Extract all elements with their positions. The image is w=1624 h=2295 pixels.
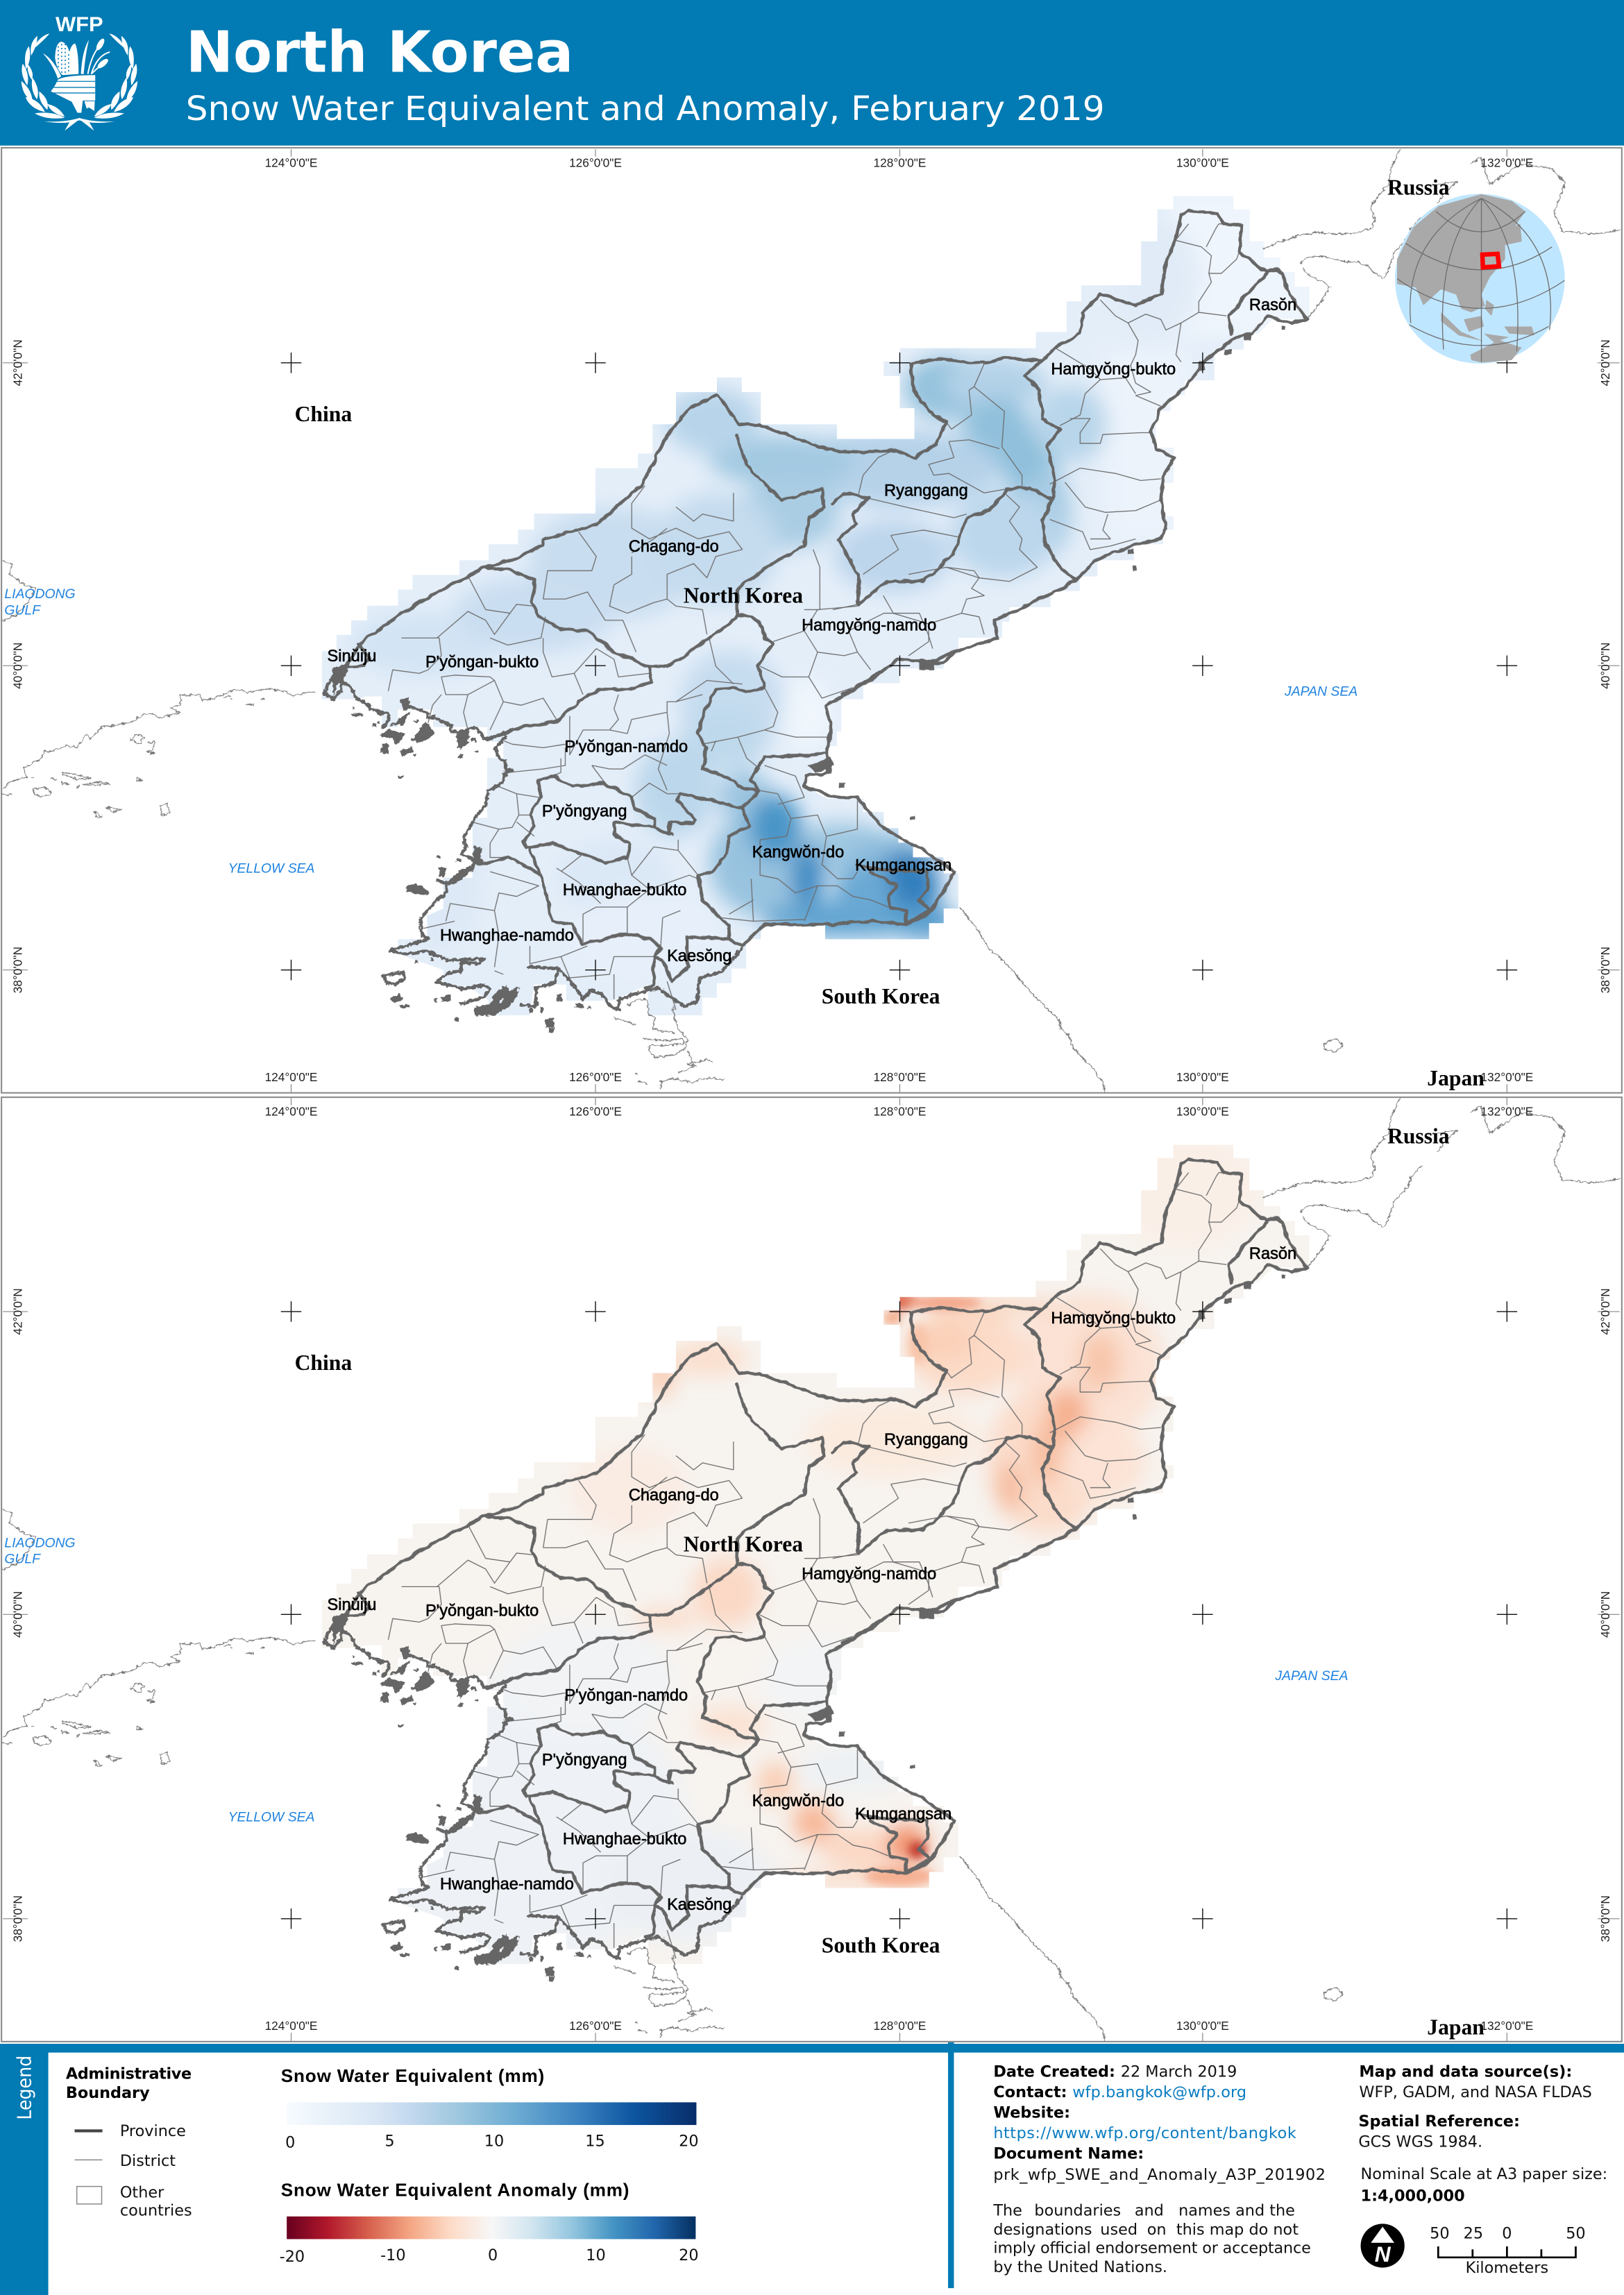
map labels: YELLOW SEA (228, 861, 315, 876)
map labels: Kumgangsan (855, 1805, 951, 1823)
map labels: 124°0'0"E (265, 1104, 317, 1118)
map labels: Ryanggang (884, 482, 968, 500)
map labels: 42°0'0"N (1598, 339, 1612, 386)
legend: anomaly colour ramp: 0 (488, 2246, 498, 2264)
map labels: 40°0'0"N (11, 643, 25, 689)
legend: anomaly colour ramp: -10 (380, 2246, 406, 2264)
document information: Website: (993, 2103, 1070, 2122)
map labels: JAPAN SEA (1284, 684, 1357, 699)
legend: administrative boundary: countries (120, 2202, 192, 2220)
disclaimer: imply official endorsement or acceptance (993, 2239, 1311, 2257)
legend: snow water equivalent colour ramp: 15 (585, 2133, 605, 2151)
document information: Contact: (993, 2083, 1067, 2101)
map labels: 40°0'0"N (1598, 1591, 1612, 1638)
map labels (4, 155, 1612, 1090)
chart: snow water equivalent raster (322, 196, 1310, 1015)
disclaimer: used (1100, 2221, 1137, 2239)
map labels: 38°0'0"N (1598, 1895, 1612, 1942)
map: province and district boundaries (325, 211, 1308, 1032)
legend: snow water equivalent colour ramp: 5 (384, 2133, 395, 2151)
document information: Date Created: (993, 2063, 1115, 2081)
map labels: 38°0'0"N (11, 947, 25, 993)
chart: anomaly raster (322, 1145, 1309, 1964)
map labels: North Korea (684, 584, 803, 608)
icon: WFP logo: WFP (56, 13, 103, 36)
data sources and reference: Spatial Reference: (1358, 2112, 1520, 2131)
legend: anomaly colour ramp: 10 (586, 2246, 606, 2264)
data sources and reference: Nominal Scale at A3 paper size: (1361, 2165, 1607, 2183)
map labels: China (295, 1350, 352, 1375)
disclaimer: designations (993, 2221, 1092, 2239)
map labels: Kangwŏn-do (752, 843, 844, 861)
document information (993, 2063, 1326, 2184)
map labels: 38°0'0"N (11, 1895, 25, 1942)
document information: prk_wfp_SWE_and_Anomaly_A3P_201902 (993, 2166, 1326, 2184)
map labels: 38°0'0"N (1598, 947, 1612, 993)
map labels: 132°0'0"E (1480, 2019, 1533, 2033)
map labels: 126°0'0"E (569, 155, 622, 169)
map labels: North Korea (684, 1532, 803, 1557)
map labels: Ryanggang (884, 1431, 968, 1449)
map labels: 126°0'0"E (569, 2019, 622, 2033)
map labels: 42°0'0"N (1598, 1288, 1612, 1335)
map labels: 40°0'0"N (11, 1591, 25, 1638)
map: graticule (3, 1098, 1620, 2042)
map labels: 126°0'0"E (569, 1104, 622, 1118)
legend: administrative boundary: Other (120, 2183, 164, 2201)
map labels: Japan (1427, 2015, 1485, 2039)
map labels: 42°0'0"N (11, 339, 25, 386)
disclaimer: and (1135, 2202, 1164, 2220)
map labels: P'yŏngyang (542, 1751, 627, 1769)
map labels: Sinŭiju (328, 1596, 376, 1614)
map labels: Hamgyŏng-bukto (1051, 361, 1176, 379)
map labels: 128°0'0"E (874, 1070, 926, 1084)
legend: snow water equivalent colour ramp: 20 (679, 2133, 699, 2151)
map labels: 124°0'0"E (265, 1070, 317, 1084)
map labels: 130°0'0"E (1176, 2019, 1229, 2033)
map labels: Russia (1387, 1124, 1450, 1148)
map labels: South Korea (822, 1933, 940, 1957)
document information: wfp.bangkok@wfp.org (1072, 2083, 1246, 2101)
document information: https://www.wfp.org/content/bangkok (993, 2124, 1296, 2142)
icon: north arrow: N (1375, 2242, 1392, 2267)
map labels: 128°0'0"E (874, 155, 926, 169)
legend: administrative boundary: District (120, 2152, 176, 2170)
map labels: 132°0'0"E (1480, 155, 1533, 169)
map labels: Hwanghae-bukto (563, 1830, 686, 1848)
map labels: Chagang-do (629, 538, 719, 556)
map labels: Russia (1387, 175, 1450, 199)
map labels: Kaesŏng (667, 947, 731, 965)
panel: legend (0, 2042, 1624, 2295)
map labels: GULF (4, 602, 41, 618)
icon: WFP logo (22, 13, 137, 130)
inset: locator globe (1395, 194, 1565, 364)
legend: snow water equivalent colour ramp: Snow Water Equivalent (mm) (281, 2065, 544, 2086)
map labels: 132°0'0"E (1480, 1104, 1533, 1118)
legend: anomaly colour ramp: Snow Water Equivalent Anomaly (mm) (281, 2179, 629, 2200)
map labels: YELLOW SEA (228, 1810, 315, 1825)
disclaimer (992, 2202, 1311, 2276)
icon: north arrow (1361, 2224, 1405, 2268)
map labels: 40°0'0"N (1598, 643, 1612, 689)
map labels: Chagang-do (629, 1487, 719, 1505)
map: graticule (3, 149, 1620, 1093)
map labels: P'yŏngan-namdo (564, 1687, 688, 1705)
map labels: Hwanghae-namdo (440, 927, 574, 945)
legend: snow water equivalent colour ramp: 0 (285, 2134, 295, 2152)
document information: 22 March 2019 (1121, 2063, 1237, 2081)
data sources and reference: WFP, GADM, and NASA FLDAS (1359, 2083, 1592, 2101)
map labels: LIAODONG (4, 1535, 76, 1550)
chart: anomaly hot spots (865, 1293, 982, 1886)
data sources and reference: 1:4,000,000 (1361, 2187, 1465, 2205)
map labels: China (295, 402, 352, 426)
map labels: Rasŏn (1249, 1245, 1296, 1263)
legend: snow water equivalent colour ramp: 10 (484, 2133, 504, 2151)
legend: anomaly colour ramp: -20 (280, 2248, 305, 2266)
map labels: P'yŏngan-namdo (564, 738, 688, 756)
scale bar: 25 (1464, 2224, 1483, 2242)
legend: administrative boundary: Province (120, 2122, 186, 2140)
map labels: P'yŏngan-bukto (425, 1602, 539, 1620)
scale bar: 50 (1430, 2224, 1450, 2242)
map labels: 130°0'0"E (1176, 1104, 1229, 1118)
subtitle: Snow Water Equivalent and Anomaly, February 2019 (186, 90, 1105, 128)
map labels: Kaesŏng (667, 1896, 731, 1914)
header banner (0, 0, 1624, 146)
map labels: 124°0'0"E (265, 155, 317, 169)
map: foreign coastlines (3, 1098, 1621, 2042)
disclaimer: on (1147, 2221, 1167, 2239)
map labels: Hamgyŏng-namdo (802, 617, 936, 635)
legend: anomaly colour ramp (280, 2179, 699, 2266)
map labels: Hamgyŏng-bukto (1051, 1310, 1176, 1328)
disclaimer: by the United Nations. (993, 2258, 1167, 2276)
map labels: 126°0'0"E (569, 1070, 622, 1084)
map labels: 42°0'0"N (11, 1288, 25, 1335)
legend: administrative boundary (66, 2065, 192, 2220)
map labels: 130°0'0"E (1176, 1070, 1229, 1084)
map labels: South Korea (822, 984, 940, 1008)
map labels: 128°0'0"E (874, 2019, 926, 2033)
map labels: Hwanghae-bukto (563, 881, 686, 899)
legend tab label: Legend (14, 2056, 35, 2120)
map labels: 130°0'0"E (1176, 155, 1229, 169)
scale bar: 50 (1566, 2224, 1586, 2242)
scale bar (1430, 2224, 1586, 2277)
map labels: Rasŏn (1249, 296, 1296, 314)
disclaimer: The (992, 2202, 1022, 2220)
legend: snow water equivalent colour ramp (281, 2065, 699, 2152)
disclaimer: names and the (1178, 2202, 1295, 2220)
disclaimer: this map do not (1176, 2221, 1299, 2239)
map: province and district boundaries (325, 1160, 1308, 1981)
map labels: GULF (4, 1552, 41, 1567)
map labels: LIAODONG (4, 586, 76, 602)
panel: snow water equivalent map (1, 148, 1622, 1093)
scale bar: Kilometers (1466, 2259, 1548, 2277)
title: North Korea (186, 19, 573, 85)
legend: administrative boundary: Boundary (66, 2084, 150, 2102)
data sources and reference: GCS WGS 1984. (1358, 2133, 1482, 2151)
map labels: 124°0'0"E (265, 2019, 317, 2033)
map: foreign coastlines (3, 149, 1621, 1093)
map labels: Kangwŏn-do (752, 1792, 844, 1810)
legend: anomaly colour ramp: 20 (679, 2246, 699, 2264)
map labels: 132°0'0"E (1480, 1070, 1533, 1084)
document information: Document Name: (993, 2145, 1144, 2163)
scale bar: 0 (1502, 2224, 1512, 2242)
legend: administrative boundary: Administrative (66, 2065, 192, 2083)
map labels: Hamgyŏng-namdo (802, 1566, 936, 1584)
map labels: P'yŏngan-bukto (425, 653, 539, 671)
map labels: P'yŏngyang (542, 802, 627, 820)
map labels: Sinŭiju (328, 647, 376, 666)
map labels: JAPAN SEA (1274, 1668, 1348, 1684)
data sources and reference: Map and data source(s): (1359, 2063, 1572, 2081)
panel: snow water equivalent anomaly map (1, 1097, 1622, 2042)
map labels: Japan (1427, 1066, 1485, 1090)
map labels: Hwanghae-namdo (440, 1876, 574, 1894)
disclaimer: boundaries (1034, 2202, 1121, 2220)
data sources and reference (1358, 2063, 1607, 2205)
map labels: Kumgangsan (855, 856, 951, 874)
map labels (4, 1104, 1612, 2039)
map labels: 128°0'0"E (874, 1104, 926, 1118)
